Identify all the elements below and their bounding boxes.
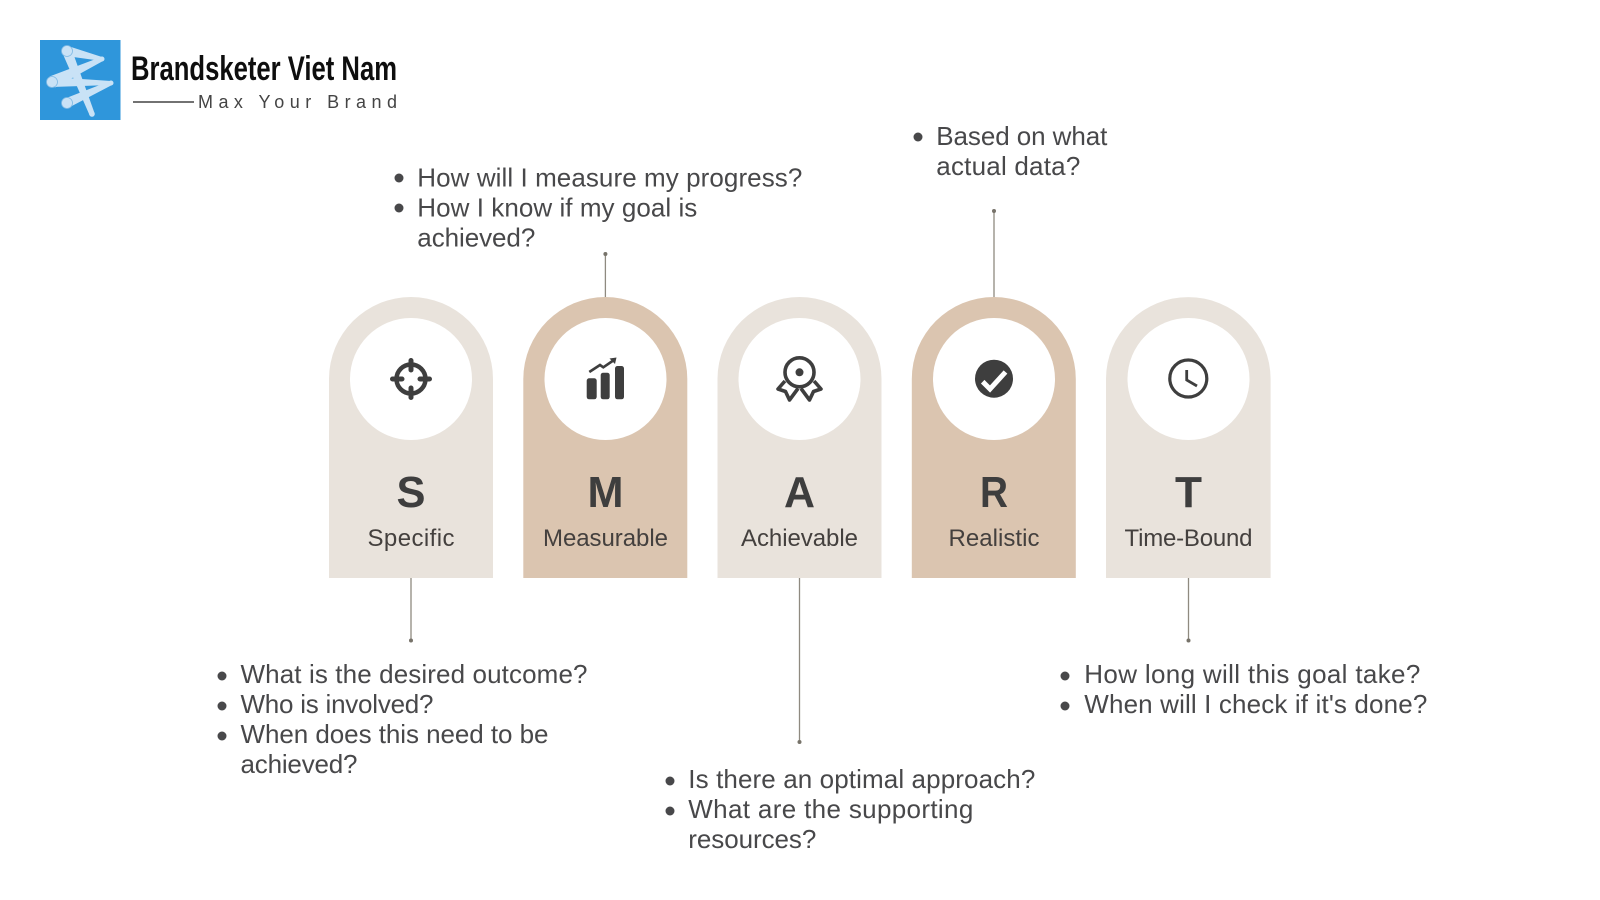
text block: Measurable questions: How I know if my goal is bbox=[417, 192, 697, 222]
connector: M bbox=[603, 252, 607, 297]
label Specific: Specific bbox=[368, 525, 454, 552]
text block: Achievable questions bbox=[666, 764, 1035, 854]
text block: Realistic questions bbox=[914, 121, 1108, 181]
label Realistic: Realistic bbox=[948, 525, 1040, 552]
text block: Specific questions: What is the desired outcome? bbox=[240, 659, 588, 689]
letter S: S bbox=[396, 468, 426, 517]
icon: clock bbox=[1170, 360, 1207, 397]
panel: T Time-Bound bbox=[1106, 297, 1271, 578]
label Achievable: Achievable bbox=[741, 525, 858, 552]
logo title: Brandsketer Viet Nam bbox=[131, 50, 397, 88]
text block: Measurable questions: How will I measure my progress? bbox=[417, 162, 802, 192]
text block: Measurable questions bbox=[394, 162, 802, 252]
icon: check circle bbox=[975, 360, 1013, 398]
text block: Achievable questions: resources? bbox=[688, 824, 816, 854]
connector: T bbox=[1186, 578, 1190, 642]
text block: Achievable questions: Is there an optimal approach? bbox=[688, 764, 1035, 794]
icon: target crosshair bbox=[392, 360, 430, 398]
panel: A Achievable bbox=[718, 297, 882, 578]
panel: S Specific bbox=[329, 297, 493, 578]
icon: logo mark bbox=[40, 40, 120, 120]
text block: Specific questions bbox=[218, 659, 588, 779]
icon: rising bar chart bbox=[587, 358, 624, 399]
text block: Realistic questions: actual data? bbox=[936, 151, 1080, 181]
text block: Specific questions: When does this need to be bbox=[240, 719, 548, 749]
text block: Time-Bound questions: How long will this goal take? bbox=[1084, 659, 1420, 689]
panel: M Measurable bbox=[523, 297, 687, 578]
panel: R Realistic bbox=[912, 297, 1076, 578]
text block: Realistic questions: Based on what bbox=[936, 121, 1108, 151]
letter T: T bbox=[1175, 468, 1202, 517]
text block: Specific questions: Who is involved? bbox=[240, 689, 434, 719]
text block: Time-Bound questions: When will I check if it's done? bbox=[1084, 689, 1427, 719]
logo tagline: Max Your Brand bbox=[198, 92, 397, 112]
text block: Time-Bound questions bbox=[1060, 659, 1427, 719]
letter M: M bbox=[588, 468, 624, 517]
letter R: R bbox=[980, 468, 1008, 517]
letter A: A bbox=[784, 468, 815, 517]
icon: award ribbon bbox=[778, 358, 821, 400]
text block: Measurable questions: achieved? bbox=[417, 222, 535, 252]
text block: Specific questions: achieved? bbox=[240, 749, 358, 779]
label Measurable: Measurable bbox=[543, 525, 668, 552]
connector: R bbox=[992, 209, 996, 297]
connector: S bbox=[409, 578, 413, 642]
connector: A bbox=[798, 578, 802, 744]
label Time-Bound: Time-Bound bbox=[1124, 525, 1252, 552]
logo: Brandsketer Viet Nam bbox=[40, 40, 397, 120]
text block: Achievable questions: What are the supporting bbox=[688, 794, 973, 824]
